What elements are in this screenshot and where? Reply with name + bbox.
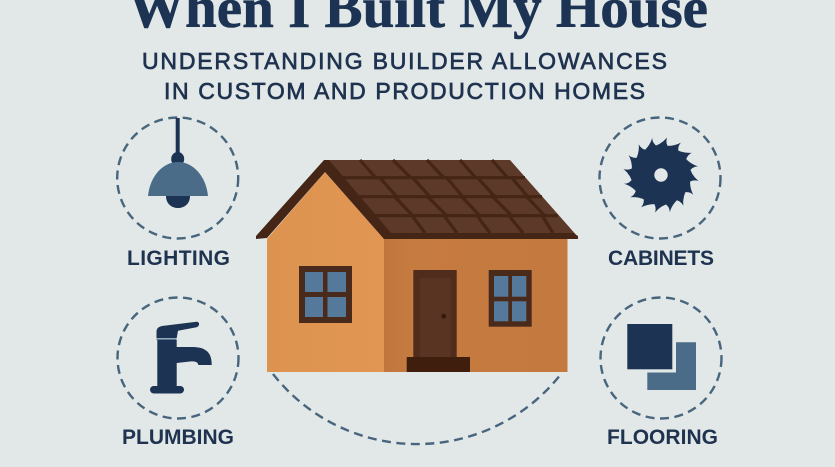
plumbing item: [118, 298, 238, 449]
dashed arc under house: [273, 374, 561, 444]
door step: [407, 357, 470, 372]
flooring item: [600, 298, 722, 449]
label: LIGHTING: [127, 247, 230, 270]
icon: pendant lamp: [148, 118, 208, 208]
dashed circle: [600, 298, 722, 418]
dashed circle: [117, 118, 238, 238]
right window: [489, 270, 532, 327]
dashed circle: [118, 298, 238, 418]
subtitle: [142, 48, 667, 104]
subtitle: UNDERSTANDING BUILDER ALLOWANCES: [142, 48, 667, 74]
label: PLUMBING: [122, 426, 234, 449]
roof: [256, 160, 578, 239]
label: CABINETS: [608, 247, 714, 270]
icon: saw blade: [622, 136, 700, 214]
dashed circle: [600, 118, 720, 238]
label: FLOORING: [607, 426, 718, 449]
icon: faucet: [150, 322, 212, 394]
cabinets item: [600, 118, 720, 270]
house: [256, 160, 578, 372]
lighting item: [117, 118, 238, 270]
front wall: [384, 238, 568, 372]
door: [413, 270, 457, 358]
left gable wall: [267, 172, 384, 372]
icon: floor tiles: [627, 324, 696, 390]
left window: [299, 266, 352, 323]
subtitle: IN CUSTOM AND PRODUCTION HOMES: [164, 78, 645, 104]
